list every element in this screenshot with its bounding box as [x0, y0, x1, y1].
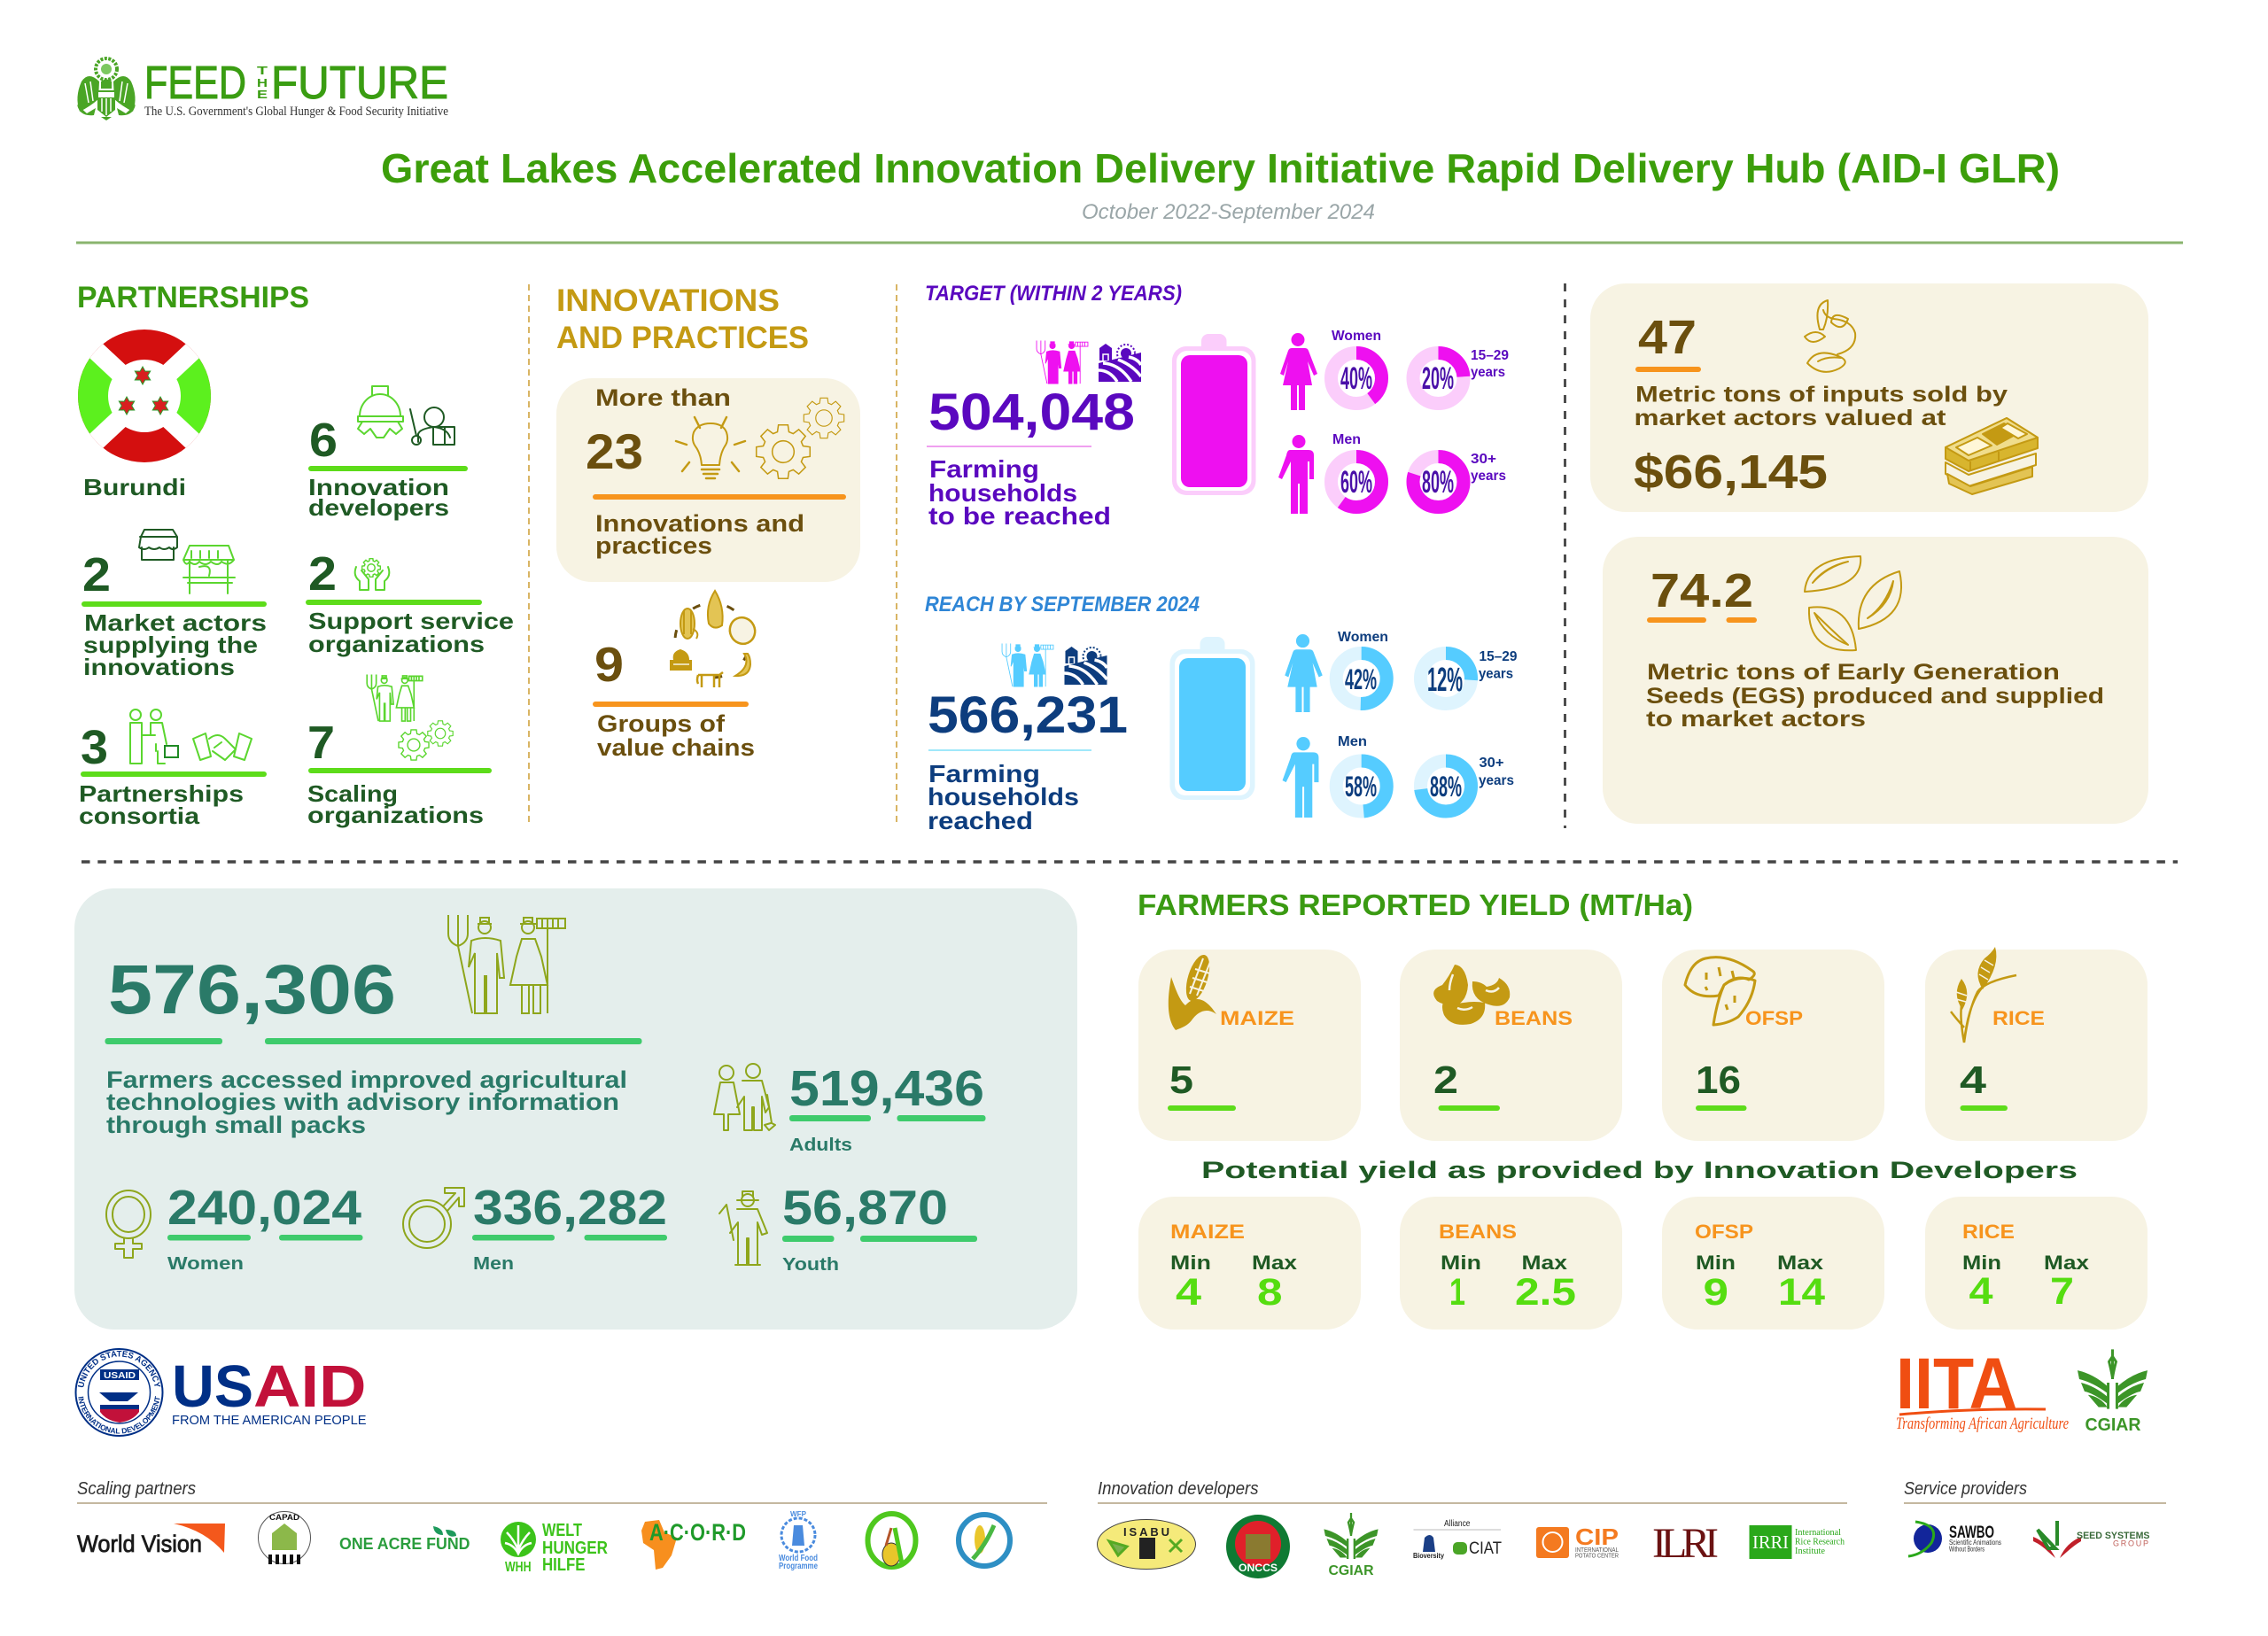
- card: rice potential: 4: [1969, 1270, 1993, 1313]
- text: metric tons EGS: Seeds (EGS) produced and supplied: [1646, 684, 2104, 709]
- text: households to be reached: [928, 455, 1111, 530]
- card: beans potential: [1400, 1197, 1622, 1330]
- logo: ACORD: A·C·O·R·D: [649, 1519, 746, 1546]
- stat: scaling organizations: organizations: [307, 802, 484, 828]
- heading: innovations and practices: [556, 283, 809, 355]
- card: 23 innovations: More than: [595, 384, 731, 411]
- logo: One Acre Fund: [339, 1526, 470, 1553]
- wordmark: FUTURE: [271, 58, 448, 109]
- logo: World Vision: World Vision: [77, 1531, 202, 1557]
- logo: Seed Systems Group: SEED SYSTEMS: [2077, 1531, 2149, 1541]
- date range: October 2022-September 2024: [1082, 200, 1375, 224]
- stat: support service organizations: organizations: [308, 631, 485, 657]
- card: maize potential: MAIZE: [1170, 1221, 1245, 1243]
- logo: USAID: [74, 1348, 367, 1437]
- text: households to be reached: households: [928, 479, 1077, 507]
- stat: adults: Adults: [789, 1136, 852, 1155]
- icon: USAID seal: [74, 1348, 163, 1437]
- wordmark: T: [257, 64, 268, 77]
- heading: innovations and practices: AND PRACTICES: [556, 321, 809, 355]
- card: OFSP yield: [1662, 950, 1884, 1141]
- chart: women 42%: Women: [1338, 630, 1388, 645]
- wordmark: H: [257, 76, 268, 89]
- logo: USAID: US: [172, 1353, 253, 1420]
- panel: farmers accessed: [74, 888, 1077, 1330]
- logo: IRRI: International: [1795, 1528, 1841, 1538]
- chart: adults 88%: years: [1479, 773, 1514, 788]
- panel: partnerships: [53, 281, 514, 829]
- card: 23 innovations: Innovations and: [595, 510, 804, 537]
- logo: WFP: Programme: [779, 1562, 818, 1571]
- stat: market actors: supplying the: [83, 632, 258, 658]
- stat: partnerships consortia: consortia: [79, 802, 200, 829]
- stat: innovation developers: [308, 386, 468, 521]
- logo: CIP: [1536, 1524, 1619, 1559]
- card: rice potential: Min: [1962, 1252, 2001, 1274]
- panel: farmers reported yield: [1138, 888, 2148, 1141]
- logo: SAWBO: Without Borders: [1949, 1545, 1984, 1554]
- logo: CIP: POTATO CENTER: [1575, 1554, 1619, 1559]
- logo: CGIAR small: [1324, 1513, 1379, 1578]
- chart: youth 20%: [1413, 348, 1509, 404]
- logo: IITA: Transforming African Agriculture: [1896, 1415, 2069, 1433]
- logo: ISABU: ISABU: [1123, 1525, 1169, 1539]
- card: OFSP potential: OFSP: [1695, 1221, 1753, 1243]
- icon: handshake: [193, 733, 252, 760]
- text: metric tons EGS: [1646, 660, 2104, 732]
- logo: ONCCS: ONCCS: [1239, 1562, 1278, 1574]
- stat: innovation developers: Innovation: [308, 474, 449, 500]
- logo: Welthungerhilfe: HUNGER: [542, 1539, 608, 1558]
- card: beans potential: 2.5: [1515, 1271, 1576, 1314]
- logo: Alliance Bioversity CIAT: Alliance: [1444, 1519, 1471, 1529]
- heading: reach: REACH BY SEPTEMBER 2024: [925, 593, 1200, 616]
- icon: USAID seal: USAID: [104, 1370, 136, 1381]
- icon: couple: [714, 1064, 775, 1130]
- chart: men 60%: Men: [1332, 432, 1361, 447]
- stat: support service organizations: [306, 547, 514, 657]
- stat: value chains: [593, 591, 760, 761]
- icon: male symbol: [403, 1188, 464, 1248]
- section: service providers: [1904, 1479, 2166, 1558]
- icon: three leaves: [1805, 556, 1901, 650]
- icon: battery blue: [1169, 637, 1254, 800]
- card: rice yield: [1925, 947, 2148, 1141]
- icon: two people with briefcase: [130, 709, 178, 764]
- stat: value chains: value chains: [597, 734, 755, 761]
- chart: men 58%: 58%: [1345, 771, 1377, 802]
- heading: target: TARGET (WITHIN 2 YEARS): [925, 282, 1182, 306]
- icon: battery magenta: [1172, 334, 1256, 495]
- text: metric tons inputs: Metric tons of inputs sold by: [1635, 383, 2008, 407]
- chart: youth 20%: 20%: [1422, 361, 1454, 396]
- logo: IITA: IITA: [1896, 1344, 2017, 1424]
- card: rice yield: 4: [1960, 1058, 1987, 1102]
- logo: CGIAR: CGIAR: [2085, 1415, 2141, 1435]
- logo: SAWBO: [1908, 1522, 2001, 1556]
- stat: scaling organizations: [307, 674, 492, 828]
- icon: farm: [1099, 344, 1141, 382]
- card: OFSP yield: 16: [1696, 1058, 1741, 1102]
- logo: CAPAD: CAPAD: [269, 1513, 300, 1522]
- logo: CGIAR: [2078, 1349, 2148, 1435]
- chart: men 60%: 60%: [1340, 465, 1372, 500]
- logo: WFP: World Food: [779, 1554, 818, 1563]
- section: innovation developers: [1097, 1479, 1847, 1578]
- icon: maize: [1169, 952, 1216, 1030]
- stat: partnerships consortia: Partnerships: [79, 780, 244, 807]
- stat: adults: [714, 1060, 985, 1155]
- logo: Coop FDEN: [868, 1514, 916, 1567]
- logo: IRRI: Institute: [1795, 1547, 1826, 1556]
- logo: WFP: [779, 1510, 818, 1571]
- chart: adults 80%: 80%: [1422, 465, 1454, 500]
- stat: adults: 519,436: [789, 1060, 984, 1117]
- logo: Alliance Bioversity CIAT: CIAT: [1469, 1539, 1502, 1558]
- card: rice yield: RICE: [1992, 1007, 2045, 1029]
- logo: CIP: CIP: [1575, 1524, 1619, 1550]
- title: Great Lakes Accelerated Innovation Delivery Initiative Rapid Delivery Hub (AID-I GLR): [381, 145, 2060, 191]
- card: maize potential: 8: [1257, 1271, 1283, 1314]
- stat: innovation developers: developers: [308, 494, 449, 521]
- card: beans yield: 2: [1433, 1058, 1458, 1102]
- icon: farmers: [367, 674, 423, 721]
- logo: One Acre Fund: ONE ACRE FUND: [339, 1535, 470, 1553]
- stat: value chains: 9: [594, 637, 624, 692]
- stat: men: [403, 1180, 667, 1274]
- chart: men 58%: Men: [1338, 734, 1367, 749]
- number: 47: 47: [1638, 311, 1697, 364]
- icon: female symbol: [106, 1190, 151, 1258]
- stat: youth: [719, 1180, 977, 1275]
- stat: youth: Youth: [782, 1255, 839, 1275]
- chart: adults 80%: 30+: [1471, 452, 1496, 467]
- card: beans potential: BEANS: [1439, 1221, 1517, 1243]
- icon: hands holding gear: [355, 559, 389, 590]
- chart: youth 12%: 15–29: [1480, 649, 1518, 664]
- text: metric tons inputs: [1634, 383, 2008, 430]
- number: 74.2: 74.2: [1651, 564, 1753, 617]
- chart: youth 12%: 12%: [1427, 662, 1463, 699]
- card: 23 innovations: 23: [586, 423, 643, 479]
- text: farmers accessed: Farmers accessed improved agricultural: [106, 1066, 627, 1093]
- icon: farmers blue: [1002, 643, 1053, 686]
- stat: value chains: Groups of: [597, 710, 726, 737]
- stat: women: Women: [167, 1254, 244, 1274]
- chart: women 42%: [1285, 630, 1388, 712]
- text: farmers accessed: through small packs: [106, 1112, 366, 1138]
- icon: sweet potato: [1685, 958, 1755, 1025]
- chart: women 40%: Women: [1332, 329, 1381, 344]
- wordmark: FEED: [144, 58, 246, 109]
- card: OFSP potential: 9: [1703, 1271, 1728, 1314]
- text: farmers accessed: technologies with advisory information: [106, 1089, 619, 1115]
- icon: banknotes: [1946, 418, 2038, 494]
- panel: potential yield: [1138, 1157, 2148, 1330]
- icon: farmers magenta: [1037, 340, 1088, 384]
- card: maize yield: MAIZE: [1220, 1007, 1294, 1029]
- card: early generation seeds: [1603, 537, 2148, 824]
- label: Burundi: Burundi: [83, 474, 186, 500]
- stat: market actors: [82, 530, 267, 680]
- card: maize potential: Max: [1252, 1252, 1298, 1274]
- logo: Alliance Bioversity CIAT: [1413, 1519, 1502, 1560]
- icon: light bulb: [676, 417, 745, 478]
- number: target households: 504,048: [928, 384, 1135, 441]
- stat: scaling organizations: 7: [307, 717, 335, 769]
- logo: Alliance Bioversity CIAT: Bioversity: [1413, 1552, 1444, 1560]
- card: OFSP potential: 14: [1778, 1271, 1825, 1314]
- text: farmers accessed: [106, 1066, 627, 1138]
- icon: sprout: [1805, 300, 1855, 372]
- number: total farmers: 576,306: [108, 950, 396, 1028]
- logo: CIP: INTERNATIONAL: [1575, 1547, 1619, 1554]
- stat: market actors: innovations: [83, 654, 235, 680]
- card: maize potential: Min: [1170, 1252, 1211, 1274]
- icon: USAID seal: UNITED STATES AGENCY: [78, 1351, 161, 1387]
- icon: Burundi flag: [78, 330, 211, 462]
- logo: IITA: [1896, 1344, 2069, 1433]
- chart: women 40%: [1280, 329, 1382, 410]
- heading: potential yield: Potential yield as provided by Innovation Developers: [1201, 1157, 2078, 1183]
- number: reached households: 566,231: [928, 686, 1128, 744]
- card: beans yield: [1400, 950, 1622, 1141]
- tagline: The U.S. Government's Global Hunger & Food Security Initiative: [144, 105, 448, 119]
- logo: IRRI: IRRI: [1752, 1531, 1789, 1553]
- logo: Welthungerhilfe: HILFE: [542, 1555, 585, 1575]
- logo: ILRI: ILRI: [1652, 1520, 1719, 1567]
- card: 23 innovations: [556, 378, 860, 582]
- icon: helmet and developer: [358, 386, 454, 445]
- logo: SAWBO: Scientific Animations: [1949, 1539, 2001, 1547]
- stat: scaling organizations: Scaling: [307, 780, 398, 807]
- chart: adults 88%: 88%: [1430, 771, 1462, 802]
- logo: Seed Systems Group: GROUP: [2113, 1539, 2148, 1548]
- logo: ACORD: [641, 1519, 746, 1570]
- card: beans potential: Max: [1522, 1252, 1568, 1274]
- number: value: $66,145: [1634, 446, 1828, 499]
- logo: IRRI: Rice Research: [1795, 1538, 1845, 1547]
- chart: youth 12%: [1421, 649, 1518, 703]
- stat: support service organizations: Support service: [308, 608, 514, 634]
- chart: adults 80%: years: [1471, 469, 1506, 484]
- card: maize yield: 5: [1169, 1058, 1193, 1102]
- card: beans yield: BEANS: [1495, 1007, 1573, 1029]
- chart: adults 80%: [1413, 452, 1506, 507]
- logo: USAID: FROM THE AMERICAN PEOPLE: [172, 1413, 367, 1428]
- chart: adults 88%: 30+: [1480, 756, 1504, 771]
- card: 23 innovations: practices: [595, 532, 712, 559]
- text: households reached: Farming: [928, 760, 1040, 787]
- chart: youth 20%: 15–29: [1471, 348, 1509, 363]
- icon: farmers outline: [448, 915, 565, 1013]
- stat: youth: 56,870: [782, 1180, 948, 1235]
- icon: value chain ring: [664, 591, 760, 688]
- heading: innovation developers: Innovation developers: [1098, 1479, 1258, 1499]
- text: households reached: [928, 760, 1079, 834]
- icon: USAID seal: INTERNATIONAL DEVELOPMENT: [78, 1396, 159, 1433]
- text: households reached: households: [928, 783, 1079, 810]
- logo: ONCCS: [1226, 1515, 1290, 1578]
- chart: men 60%: [1278, 432, 1382, 514]
- logo: Seed Systems Group: [2033, 1521, 2149, 1558]
- card: maize potential: [1138, 1197, 1361, 1330]
- stat: partnerships consortia: 3: [81, 721, 108, 774]
- panel: innovations and practices: [556, 283, 860, 761]
- card: maize potential: 4: [1176, 1271, 1201, 1314]
- card: OFSP yield: OFSP: [1745, 1007, 1803, 1029]
- logo: Welthungerhilfe: [501, 1521, 608, 1575]
- card: beans potential: Min: [1441, 1252, 1481, 1274]
- logo: WFP: WFP: [790, 1510, 807, 1518]
- icon: shop and market stall: [139, 530, 235, 593]
- text: metric tons EGS: to market actors: [1646, 707, 1866, 732]
- card: rice potential: [1925, 1197, 2148, 1330]
- chart: women 40%: 40%: [1340, 361, 1372, 396]
- heading: partnerships: PARTNERSHIPS: [77, 281, 309, 314]
- logo: ISABU: [1097, 1520, 1196, 1570]
- stat: support service organizations: 2: [308, 547, 337, 601]
- heading: service providers: Service providers: [1904, 1479, 2027, 1499]
- text: households reached: reached: [928, 807, 1033, 834]
- icon: rice: [1951, 947, 2016, 1043]
- chart: women 42%: 42%: [1345, 663, 1377, 695]
- card: rice potential: RICE: [1962, 1221, 2015, 1243]
- logo: CAPAD: [259, 1511, 310, 1564]
- card: rice potential: 7: [2050, 1270, 2074, 1313]
- text: metric tons inputs: market actors valued at: [1634, 406, 1946, 430]
- text: metric tons EGS: Metric tons of Early Generation: [1647, 660, 2060, 685]
- card: beans potential: 1: [1449, 1271, 1465, 1314]
- chart: youth 20%: years: [1471, 365, 1505, 380]
- stat: partnerships consortia: [79, 709, 267, 829]
- stat: market actors: 2: [82, 548, 111, 601]
- logo: Nagiruka: [959, 1515, 1010, 1566]
- wordmark: [144, 58, 448, 109]
- chart: adults 88%: [1421, 756, 1514, 811]
- icon: farm: [1065, 647, 1107, 685]
- stat: men: 336,282: [473, 1180, 667, 1235]
- heading: innovations and practices: INNOVATIONS: [556, 283, 780, 318]
- logo: Feed the Future: [77, 58, 448, 120]
- logo: Welthungerhilfe: WHH: [505, 1560, 532, 1575]
- stat: women: [106, 1180, 363, 1274]
- panel: reach: [925, 593, 1518, 834]
- chart: men 58%: [1283, 734, 1386, 818]
- heading: reported yield: FARMERS REPORTED YIELD (MT/Ha): [1138, 888, 1693, 921]
- panel: target: [925, 282, 1509, 530]
- icon: eagle seal: [77, 58, 136, 120]
- icon: youth farmer: [719, 1191, 767, 1265]
- text: households to be reached: Farming: [929, 455, 1039, 483]
- stat: women: 240,024: [167, 1180, 361, 1235]
- stat: market actors: Market actors: [84, 609, 267, 636]
- card: OFSP potential: Max: [1777, 1252, 1824, 1274]
- icon: gears: [399, 721, 453, 760]
- stat: innovation developers: 6: [309, 414, 338, 467]
- card: inputs sold: [1590, 283, 2148, 512]
- logo: SAWBO: SAWBO: [1949, 1524, 1994, 1542]
- chart: youth 12%: years: [1479, 666, 1513, 682]
- section: scaling partners: [77, 1479, 1047, 1575]
- logo: Welthungerhilfe: WELT: [542, 1521, 582, 1540]
- card: OFSP potential: [1662, 1197, 1884, 1330]
- card: maize yield: [1138, 950, 1361, 1141]
- text: households to be reached: to be reached: [928, 502, 1111, 530]
- card: rice potential: Max: [2044, 1252, 2090, 1274]
- wordmark: E: [257, 88, 268, 101]
- logo: IRRI: [1749, 1525, 1845, 1559]
- card: OFSP potential: Min: [1696, 1252, 1736, 1274]
- logo: CGIAR small: CGIAR: [1329, 1563, 1374, 1578]
- stat: men: Men: [473, 1254, 514, 1274]
- heading: scaling partners: Scaling partners: [77, 1479, 196, 1499]
- icon: beans: [1433, 965, 1510, 1025]
- logo: USAID: AID: [253, 1353, 367, 1420]
- icon: gears: [757, 398, 844, 478]
